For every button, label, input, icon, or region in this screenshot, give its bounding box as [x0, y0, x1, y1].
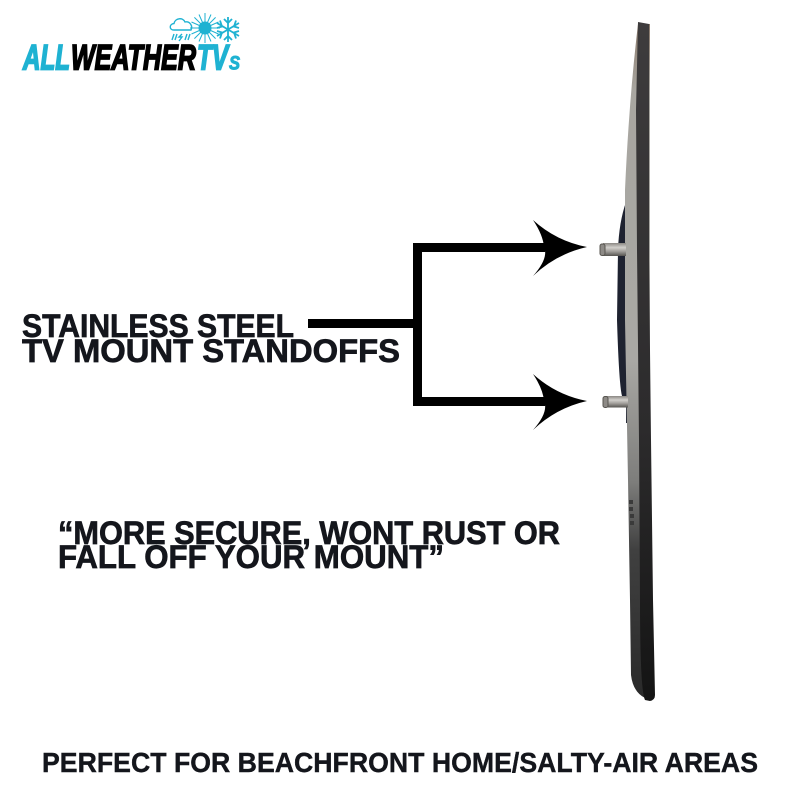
icon: sun: [190, 13, 220, 43]
quote text: [58, 515, 560, 575]
heading: stainless steel tv mount standoffs: [22, 308, 400, 369]
tv vents: [629, 500, 634, 525]
logo: All Weather TVs: [22, 13, 240, 78]
tv dark edge: [636, 22, 655, 701]
heading: stainless steel tv mount standoffs: STAINLESS STEEL: [22, 308, 294, 344]
quote text: FALL OFF YOUR MOUNT”: [58, 539, 444, 575]
heading: stainless steel tv mount standoffs: TV MOUNT STANDOFFS: [22, 333, 400, 369]
mount bracket: [617, 202, 630, 423]
standoff: top: [600, 243, 626, 256]
product photo: tv side view: [600, 22, 655, 701]
arrow: bracket connector to both standoffs: [308, 220, 587, 430]
quote text: “MORE SECURE, WONT RUST OR: [58, 515, 560, 551]
icon: snowflake: [217, 17, 239, 42]
logo wordmark: TV: [197, 38, 230, 78]
icon: rain cloud: [170, 19, 192, 41]
logo wordmark: WEATHER: [71, 38, 197, 78]
footer tagline: PERFECT FOR BEACHFRONT HOME/SALTY-AIR AREAS: [42, 747, 758, 778]
standoff: bottom: [603, 396, 628, 408]
tv bezel: [625, 24, 650, 698]
logo wordmark: S: [229, 54, 240, 74]
logo wordmark: ALL: [22, 38, 70, 78]
